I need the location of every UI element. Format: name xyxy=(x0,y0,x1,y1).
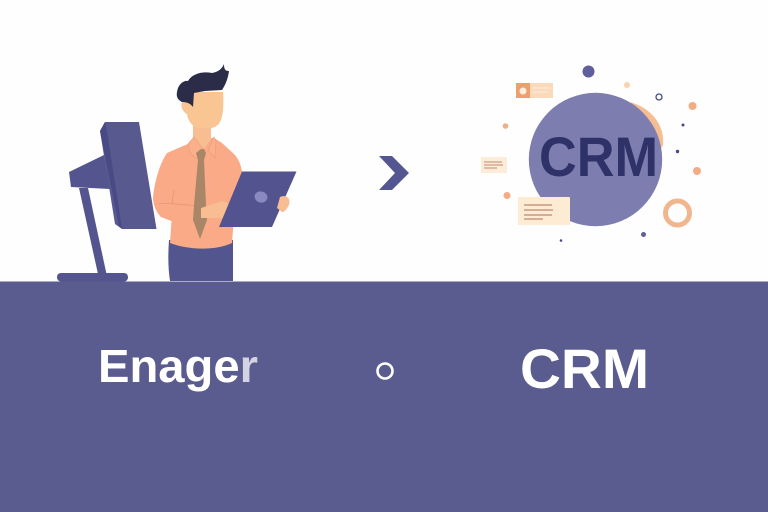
shirt xyxy=(153,138,242,249)
illustration: man with tablet xyxy=(153,64,296,281)
bottom panel band xyxy=(0,282,768,512)
label: CRM: CRM xyxy=(520,337,649,400)
sleeve underside xyxy=(157,203,200,221)
illustration: CRM circle with decorations xyxy=(481,66,701,242)
bottom card xyxy=(518,197,570,225)
trousers xyxy=(168,240,233,281)
hair xyxy=(177,64,229,107)
CRM circle label: CRM xyxy=(539,125,658,188)
tie xyxy=(193,149,207,239)
neck xyxy=(193,122,211,149)
illustration: computer monitor on stand xyxy=(57,122,156,282)
small dots xyxy=(503,66,701,242)
forearm and hand xyxy=(201,201,230,218)
sleeve fold xyxy=(159,190,200,206)
fingers holding tablet xyxy=(277,196,290,212)
tablet xyxy=(219,172,296,227)
label: Enager: Enager xyxy=(98,340,258,392)
top card xyxy=(516,83,553,98)
large CRM circle xyxy=(529,93,662,226)
ring xyxy=(666,201,690,225)
peach arc behind circle xyxy=(630,102,663,150)
left small card xyxy=(481,157,507,173)
head xyxy=(181,92,223,128)
connector ring xyxy=(378,364,392,378)
arrow chevron xyxy=(379,156,409,190)
collar xyxy=(188,137,216,159)
